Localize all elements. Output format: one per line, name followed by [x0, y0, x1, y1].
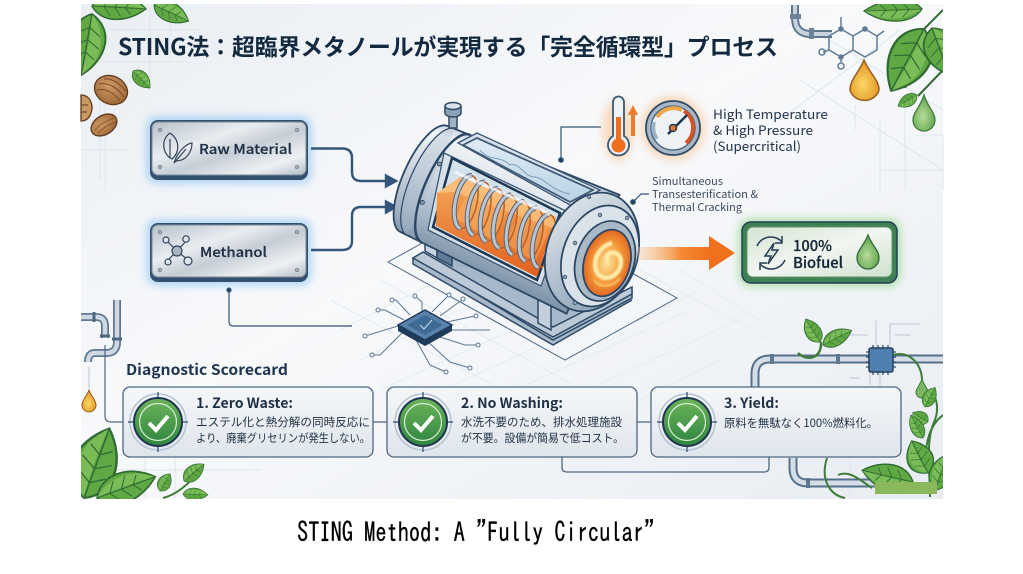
arrow: raw material to reactor	[311, 148, 396, 186]
decoration: right pipes	[755, 320, 943, 488]
decoration: top-right leaves	[863, 4, 943, 108]
label: 100% biofuel: Biofuel	[793, 252, 843, 273]
icon: thermometer	[602, 97, 634, 162]
decoration: left pipes	[81, 300, 123, 422]
decoration: oil drop	[850, 60, 879, 100]
icon: check badge	[128, 392, 188, 452]
swirl	[595, 243, 621, 278]
reactor base	[413, 222, 632, 345]
text: simultaneous reaction: Simultaneous	[652, 174, 723, 189]
leader: simultaneous reaction	[631, 194, 649, 204]
label: methanol: Methanol	[200, 241, 267, 261]
icon: leaves	[164, 133, 192, 163]
decoration: bottom-right vines and leaves	[825, 354, 958, 498]
rivets	[563, 195, 629, 305]
label: 100% biofuel: 100%	[793, 235, 832, 256]
text: yield	[724, 393, 878, 431]
chip traces	[363, 293, 490, 374]
decoration: molecule	[819, 17, 884, 69]
decoration: nuts	[81, 70, 132, 140]
text: simultaneous reaction: Transesterification &	[652, 187, 758, 202]
top valve	[445, 102, 461, 128]
reactor vessel	[378, 111, 619, 314]
icon: pressure gauge	[640, 95, 706, 161]
text: high temperature and pressure: High Temperature	[713, 104, 828, 123]
decoration: left oil drop	[82, 390, 96, 412]
text: simultaneous reaction: Thermal Cracking	[652, 200, 742, 215]
right flange	[529, 179, 655, 325]
title: STING法：超臨界メタノールが実現する「完全循環型」プロセス	[118, 28, 778, 62]
icon: check badge	[657, 392, 717, 452]
text: simultaneous reaction	[652, 174, 758, 215]
text: high temperature and pressure: & High Pressure	[713, 120, 813, 139]
text: yield: 原料を無駄なく100%燃料化。	[724, 415, 878, 431]
heading: diagnostic scorecard: Diagnostic Scorecard	[126, 359, 288, 380]
panel: methanol plate	[146, 219, 312, 286]
decoration: top-right pipe	[790, 5, 832, 39]
chip	[363, 293, 490, 374]
text: high temperature and pressure: (Supercritical)	[713, 136, 801, 155]
connectors between cards	[373, 422, 769, 472]
text: zero waste	[196, 393, 370, 446]
decoration: sprout on pipe	[798, 315, 855, 358]
reactor	[378, 102, 655, 345]
arrow: methanol to reactor	[311, 202, 396, 250]
panel: infographic background	[81, 4, 943, 499]
icon: green drop	[857, 235, 879, 269]
panel: card 1 zero waste	[123, 387, 373, 457]
icon: molecule	[163, 236, 192, 265]
icon: recycling energy	[757, 236, 785, 270]
main glass window	[433, 158, 560, 280]
window frame	[428, 133, 600, 286]
label: 100% biofuel	[793, 235, 843, 273]
upper glass window	[463, 138, 593, 202]
decoration: top-left leaves	[81, 4, 190, 88]
arrow: output to biofuel	[638, 236, 735, 270]
hot reaction material	[436, 177, 556, 277]
decoration: bottom-left leaves	[81, 427, 208, 499]
leader: high temperature	[559, 127, 601, 162]
panel: card 3 yield	[651, 387, 901, 457]
connector: methanol to chip	[227, 288, 352, 326]
panel: raw material plate	[146, 116, 312, 184]
icon: chip on pipe	[866, 345, 896, 375]
panel: biofuel box	[738, 218, 901, 287]
text: zero waste: エステル化と熱分解の同時反応に	[196, 414, 370, 430]
text: no washing: 2. No Washing:	[461, 393, 563, 413]
label: raw material: Raw Material	[199, 138, 292, 158]
text: no washing: が不要。設備が簡易で低コスト。	[461, 430, 624, 446]
text: no washing	[461, 393, 624, 446]
heating coil	[450, 173, 560, 270]
icon: check badge	[393, 392, 453, 452]
caption: STING Method: A "Fully Circular"	[297, 518, 655, 546]
text: high temperature and pressure	[713, 104, 828, 155]
floor plate	[388, 200, 677, 360]
text: zero waste: 1. Zero Waste:	[196, 393, 293, 413]
decoration: green drop	[913, 95, 935, 131]
icon: up arrow	[628, 105, 638, 136]
panel: card 2 no washing	[387, 387, 637, 457]
text: zero waste: より、廃棄グリセリンが発生しない。	[196, 430, 370, 446]
text: yield: 3. Yield:	[724, 393, 779, 413]
text: no washing: 水洗不要のため、排水処理施設	[461, 414, 622, 430]
